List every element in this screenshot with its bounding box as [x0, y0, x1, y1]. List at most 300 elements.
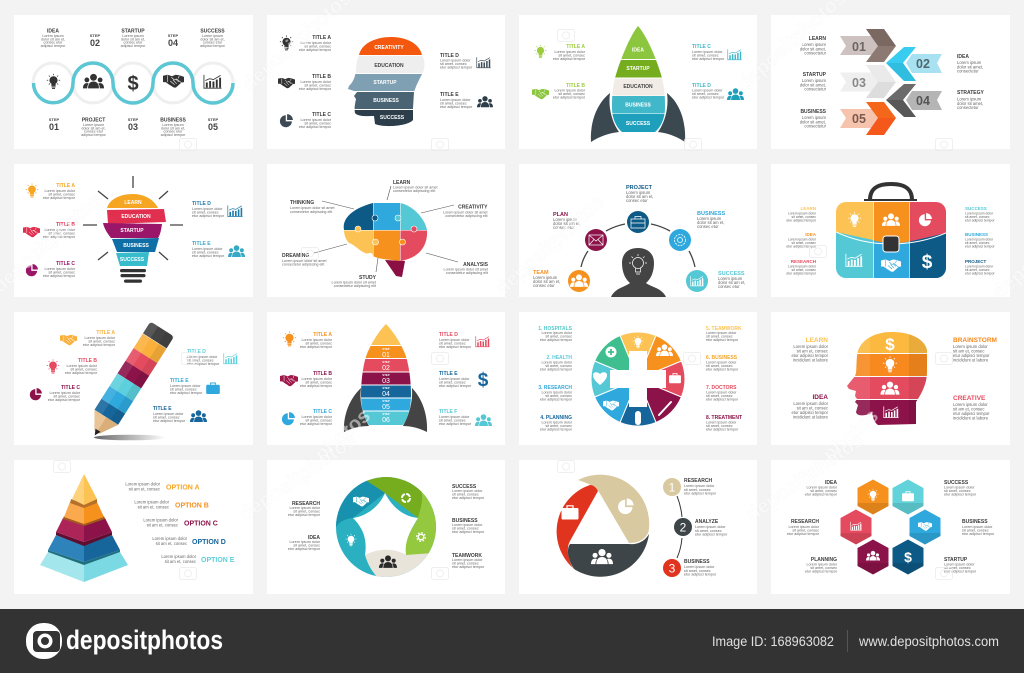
text: title A: sit amet, consec: [88, 340, 115, 344]
text: business: Lorem ipsum dolor: [684, 565, 715, 569]
step: success: adipisci tempor: [200, 44, 226, 48]
text: research: sit amet, consec: [684, 488, 711, 492]
step: business: consec etur: [163, 130, 183, 134]
option D: Lorem ipsum dolor: [152, 536, 188, 541]
website: www.depositphotos.com: [858, 634, 999, 649]
text: doctors: Lorem ipsum dolor: [706, 390, 737, 394]
text: business: sit amet, consec: [965, 241, 990, 245]
text: project: Lorem ipsum: [626, 190, 651, 195]
icon: case: [669, 374, 681, 383]
text: planning: PLANNING: [811, 557, 837, 563]
text: title A: TITLE A: [313, 332, 332, 338]
icon: bulb: [283, 331, 296, 346]
text: title D: TITLE D: [192, 201, 211, 207]
bulb labels: LEARN: [124, 200, 142, 206]
bulb rays: [83, 176, 183, 260]
panel: stepped rocket: [267, 312, 505, 445]
node: team: [568, 270, 590, 292]
text: research: sit amet, consec: [293, 510, 320, 514]
text: business: dolor sit amet,: [800, 119, 826, 124]
bulb labels: BUSINESS: [123, 243, 149, 249]
text: brainstorm: BRAINSTORM: [953, 337, 997, 344]
text: startup: STARTUP: [803, 72, 827, 78]
hexagon: navy: [892, 540, 924, 574]
text: brainstorm: incididunt ut labore: [953, 358, 989, 362]
footer bar: [0, 609, 1024, 673]
rocket fins: [344, 388, 427, 432]
text: research: Lorem ipsum dolor: [684, 484, 715, 488]
pencil: [83, 321, 174, 443]
arrow 03: 03: [852, 76, 866, 90]
badge 2: [674, 518, 692, 536]
text: title D: Lorem ipsum dolor: [439, 338, 470, 342]
text: business: BUSINESS: [452, 518, 478, 524]
arrow 02: 02: [916, 57, 930, 71]
rocket band labels: SUCCESS: [626, 121, 651, 127]
option B: Lorem ipsum dolor: [134, 500, 170, 504]
icon: handshake: [60, 335, 77, 345]
rocket step labels: STEP: [382, 412, 390, 416]
rocket band labels: BUSINESS: [625, 102, 651, 108]
text: title B: Lorem ipsum dolor: [300, 80, 332, 84]
text: learn: LEARN: [800, 206, 816, 211]
text: title D: TITLE D: [692, 83, 711, 89]
text: planning: Lorem ipsum dolor: [806, 562, 838, 566]
text: brainstorm: etur adipisci tempor: [953, 353, 990, 358]
text: idea: Lorem ipsum: [957, 60, 982, 65]
text: title C: sit amet, consec: [305, 418, 332, 422]
text: business: Lorem ipsum: [802, 115, 827, 120]
text: title E: TITLE E: [439, 371, 458, 377]
text: research: etur adipisci tempor: [787, 532, 820, 536]
step: 05: STEP: [208, 117, 219, 122]
text: idea: etur adipisci tempor: [786, 244, 817, 248]
connector arcs: [677, 496, 682, 558]
text: creativity: Lorem ipsum dolor sit amet: [443, 210, 488, 214]
text: title B: etur adipisci tempor: [43, 235, 76, 239]
icon: bulb: [47, 74, 60, 89]
icon: people: [83, 74, 104, 88]
head bands: [847, 332, 927, 425]
text: thinking: consectetur adipiscing elit: [290, 210, 332, 214]
icon: people: [475, 414, 492, 426]
text: business: BUSINESS: [965, 232, 988, 237]
text: title B: Lorem ipsum dolor: [554, 88, 586, 92]
text: title B: Lorem ipsum dolor: [301, 377, 333, 381]
rocket step labels: STEP: [382, 360, 390, 364]
text: dreaming: Lorem ipsum dolor sit amet: [282, 259, 326, 263]
text: project: Lorem ipsum dolor: [965, 264, 994, 268]
icon: handshake: [603, 401, 619, 410]
icon: gear: [417, 533, 425, 541]
text: creative: etur adipisci tempor: [953, 411, 990, 416]
hexagon: blue: [910, 510, 940, 544]
step: 03: 03: [128, 122, 138, 132]
text: brainstorm: sit am et, consec: [953, 348, 984, 354]
text: idea: sit amet, consec: [792, 241, 816, 245]
text: title C: TITLE C: [56, 261, 75, 267]
option E: sit am et, consec: [165, 559, 196, 564]
text: strategy: Lorem ipsum: [957, 96, 982, 102]
text: business: consectetur: [804, 124, 827, 129]
text: creative: incididunt ut labore: [953, 416, 989, 420]
text: business: dolor sit am et,: [697, 220, 724, 225]
text: research: Lorem ipsum dolor: [289, 506, 321, 510]
text: title E: Lorem ipsum dolor: [192, 247, 223, 251]
text: idea: IDEA: [805, 232, 817, 237]
icon: people: [228, 245, 245, 257]
text: learn: Lorem ipsum: [802, 42, 827, 47]
icon: people: [591, 549, 613, 564]
hexagon: maroon: [858, 540, 888, 574]
icon: bulb: [47, 359, 59, 373]
bulb labels: [120, 200, 151, 263]
step: idea: Lorem ipsum: [42, 34, 64, 38]
text: title E: sit amet, consec: [440, 102, 467, 106]
gray rings: [33, 63, 233, 103]
text: business: BUSINESS: [962, 519, 988, 525]
option B: OPTION B: [175, 502, 209, 510]
text: plan: PLAN: [553, 212, 568, 218]
text: idea: Lorem ipsum dolor: [793, 401, 829, 406]
arrow 02: [886, 47, 942, 81]
text: title A: TITLE A: [56, 183, 75, 189]
text: planning: sit amet, consec: [545, 424, 572, 428]
text: business: etur adipisci tempor: [965, 244, 995, 248]
text: title E: sit amet, consec: [170, 388, 197, 392]
icon: dollar: $: [885, 335, 895, 354]
text: success: SUCCESS: [965, 206, 987, 211]
icon: plus: [606, 346, 616, 358]
text: idea: IDEA: [308, 535, 320, 541]
icon: pill: [635, 411, 641, 425]
text: teamwork: sit amet, consec: [706, 334, 733, 338]
icon: pie: [618, 498, 634, 514]
text: title F: etur adipisci tempor: [153, 419, 186, 423]
text: learn: sit amet, consec: [792, 215, 816, 219]
icon: people: [190, 410, 207, 422]
text: learn: LEARN: [393, 180, 411, 186]
icon: dollar: $: [478, 370, 489, 391]
text: research: etur adipisci tempor: [786, 272, 817, 276]
text: analysis: consectetur adipiscing elit: [446, 271, 488, 275]
text: analyze: Lorem ipsum dolor: [695, 525, 726, 529]
text: business: etur adipisci tempor: [706, 368, 739, 372]
step: idea: IDEA: [47, 28, 59, 34]
text: business: sit amet, consec: [962, 528, 989, 532]
icon: heart: [593, 372, 607, 385]
icon: dollar: $: [127, 73, 139, 95]
text: research: etur adipisci tempor: [288, 513, 321, 517]
text: success: Lorem ipsum dolor: [944, 486, 975, 490]
head silhouette bands: [348, 37, 424, 126]
text: title B: sit amet, consec: [48, 232, 75, 236]
text: project: etur adipisci tempor: [965, 272, 995, 276]
text: title C: sit amet, consec: [692, 54, 719, 58]
text: study: STUDY: [359, 275, 377, 281]
badge 3: 3: [669, 562, 676, 576]
bulb labels: SUCCESS: [120, 257, 145, 263]
panel: medical cross circle: [519, 312, 757, 445]
text: title C: sit amet, consec: [53, 394, 80, 398]
step: success: consec etur: [203, 41, 223, 45]
text: doctors: sit amet, consec: [706, 394, 733, 398]
text: thinking: Lorem ipsum dolor sit amet: [290, 206, 334, 210]
text: teamwork: TEAMWORK: [452, 553, 482, 559]
option C: [143, 518, 218, 528]
icon: bulb: [883, 356, 897, 372]
step: startup: Lorem ipsum: [122, 34, 144, 38]
text: thinking: THINKING: [290, 200, 314, 206]
text: title A: etur adipisci tempor: [300, 345, 333, 349]
white star: [353, 493, 418, 555]
text: title B: etur adipisci tempor: [300, 384, 333, 388]
text: title A: Lorem ipsum dolor: [301, 338, 333, 342]
step: 01: STEP: [49, 117, 60, 122]
text: title C: Lorem ipsum dolor: [44, 267, 76, 271]
circle segments: [336, 477, 436, 577]
text: title D: TITLE D: [187, 349, 206, 355]
text: title D: Lorem ipsum dolor: [440, 58, 471, 62]
option A: [125, 482, 200, 492]
node: plan: [585, 229, 607, 251]
text: title C: sit amet, consec: [48, 270, 75, 274]
text: idea: incididunt ut labore: [793, 414, 829, 420]
text: idea: IDEA: [825, 480, 837, 486]
brain puzzle pieces: [344, 203, 428, 261]
text: learn: Lorem ipsum dolor: [788, 212, 817, 216]
pyramid level 3: [56, 516, 112, 542]
text: startup: sit amet, consec: [944, 566, 971, 570]
text: success: Lorem ipsum: [718, 276, 743, 281]
text: title C: etur adipisci tempor: [48, 398, 81, 402]
text: business: etur adipisci tempor: [452, 530, 485, 534]
option E: Lorem ipsum dolor: [161, 554, 197, 559]
text: research: RESEARCH: [791, 259, 816, 264]
text: idea: Lorem ipsum dolor: [788, 238, 817, 242]
text: study: consectetur adipiscing elit: [334, 284, 376, 288]
icon: people: [880, 382, 900, 395]
text: success: etur adipisci tempor: [452, 496, 485, 500]
text: business: 6. BUSINESS: [706, 355, 738, 361]
step: project: dolor sit am et,: [81, 126, 106, 130]
text: success: SUCCESS: [944, 480, 969, 486]
step: startup: dolor sit am et,: [121, 37, 145, 41]
text: idea: IDEA: [957, 54, 969, 60]
text: strategy: dolor sit amet,: [957, 101, 983, 106]
text: idea: sit amet, consec: [293, 544, 320, 548]
rocket step labels: STEP: [382, 399, 390, 403]
panel: head stack: [267, 15, 505, 149]
text: title A: TITLE A: [566, 44, 585, 50]
text: startup: consectetur: [804, 87, 827, 92]
step: 04: STEP: [168, 33, 179, 38]
rocket body bands: [361, 324, 411, 425]
icon: thermometer: [659, 402, 671, 415]
text: title C: TITLE C: [61, 385, 80, 391]
text: title E: TITLE E: [440, 92, 459, 98]
text: creativity: CREATIVITY: [458, 204, 488, 210]
icon: handshake: [278, 78, 295, 88]
text: doctors: etur adipisci tempor: [706, 398, 739, 402]
text: title C: Lorem ipsum dolor: [692, 50, 723, 54]
text: strategy: STRATEGY: [957, 90, 985, 96]
text: title C: TITLE C: [313, 409, 332, 415]
text: title A: sit amet, consec: [305, 342, 332, 346]
text: idea: etur adipisci tempor: [791, 410, 829, 415]
arrow 04: [886, 84, 942, 117]
text: title E: TITLE E: [170, 378, 189, 384]
hexagon: teal: [892, 480, 924, 514]
icon: chart: [846, 254, 863, 266]
hexagon: orange: [858, 480, 888, 514]
rocket step labels: 02: [382, 365, 390, 372]
text: title A: etur adipisci tempor: [43, 196, 76, 200]
text: title B: Lorem ipsum dolor: [66, 364, 98, 368]
text: analyze: etur adipisci tempor: [695, 532, 728, 536]
bulb base: [120, 269, 146, 283]
pyramid level 2: [64, 499, 104, 524]
step: project: Lorem ipsum: [83, 123, 104, 127]
panel: pyramid: [14, 460, 253, 594]
watermarks: depositphotos: [235, 429, 361, 526]
text: idea: etur adipisci tempor: [288, 547, 321, 551]
option C: Lorem ipsum dolor: [143, 518, 179, 522]
text: research: RESEARCH: [791, 519, 819, 525]
rocket band labels: IDEA: [632, 48, 644, 54]
option A: Lorem ipsum dolor: [125, 482, 161, 486]
text: title D: Lorem ipsum dolor: [692, 88, 723, 92]
text: dreaming: DREAMING: [282, 253, 309, 259]
text: research: Lorem ipsum dolor: [788, 264, 817, 268]
leader lines: [314, 186, 458, 272]
text: planning: 4. PLANNING: [540, 415, 572, 421]
text: learn: LEARN: [809, 36, 826, 42]
head band labels: SUCCESS: [380, 115, 405, 121]
panel: puzzle brain: [267, 164, 505, 297]
icon: chart: [884, 406, 899, 418]
logo mark: [26, 623, 62, 659]
arrow 01: 01: [852, 40, 866, 54]
rocket step labels: 03: [382, 378, 390, 385]
rocket step labels: 01: [382, 352, 390, 359]
text: project: PROJECT: [626, 185, 653, 191]
text: title E: Lorem ipsum dolor: [440, 98, 471, 102]
node: success: [686, 270, 708, 292]
head band labels: [373, 45, 405, 121]
text: title E: etur adipisci tempor: [440, 105, 473, 109]
text: business: Lorem ipsum: [697, 216, 722, 221]
icon: case: [206, 383, 220, 394]
text: success: sit amet, consec: [452, 492, 479, 496]
text: title E: sit amet, consec: [439, 380, 466, 384]
step: idea: adipisci tempor: [41, 44, 66, 48]
step: 05: 05: [208, 122, 218, 132]
icon: bulb: [848, 212, 861, 227]
text: analysis: Lorem ipsum dolor sit amet: [444, 268, 488, 272]
panel: star cycle: [267, 460, 505, 594]
head band labels: CREATIVITY: [374, 45, 404, 51]
icon: people: [882, 213, 900, 226]
text: planning: etur adipisci tempor: [805, 570, 838, 574]
text: title E: etur adipisci tempor: [170, 391, 203, 395]
option D: OPTION D: [192, 539, 226, 546]
icon: pie: [282, 412, 295, 425]
rocket step labels: 05: [382, 404, 390, 411]
pyramid level 4: [48, 532, 120, 562]
text: title B: TITLE B: [312, 74, 331, 80]
icon: handshake: [280, 375, 298, 386]
icon: handshake: [163, 75, 184, 88]
text: title F: Lorem ipsum dolor: [153, 412, 184, 416]
text: title F: TITLE E: [153, 406, 172, 412]
text: research: Lorem ipsum dolor: [541, 390, 573, 394]
text: business: Lorem ipsum dolor: [452, 523, 483, 527]
text: startup: etur adipisci tempor: [944, 570, 977, 574]
text: success: sit amet, consec: [965, 215, 990, 219]
text: learn: Lorem ipsum dolor sit amet: [393, 186, 437, 190]
text: dreaming: consectetur adipiscing elit: [282, 262, 324, 266]
option D: [152, 536, 226, 546]
text: title A: etur adipisci tempor: [83, 343, 116, 347]
text: title A: etur adipisci tempor: [553, 57, 586, 61]
text: title C: Lorem ipsum dolor: [301, 415, 333, 419]
text: title A: sit amet, consec: [304, 44, 331, 48]
text: startup: Lorem ipsum: [802, 78, 827, 83]
pyramid level 5: [40, 550, 128, 582]
panel: numbered arrows: [771, 15, 1010, 149]
text: treatment: 8. TREATMENT: [706, 415, 742, 421]
text: learn: consectetur: [804, 51, 827, 56]
text: creative: CREATIVE: [953, 395, 986, 402]
head band labels: EDUCATION: [374, 63, 404, 69]
icon: bulb: [346, 534, 356, 546]
head band labels: BUSINESS: [373, 98, 399, 104]
text: research: sit amet, consec: [792, 528, 819, 532]
text: business: BUSINESS: [697, 211, 725, 217]
step: project: PROJECT: [82, 118, 105, 124]
text: startup: Lorem ipsum dolor: [944, 562, 975, 566]
badge 3: [663, 559, 681, 577]
text: title B: Lorem ipsum dolor: [44, 228, 76, 232]
text: teamwork: 5. TEAMWORK: [706, 326, 742, 332]
text: hospitals: Lorem ipsum dolor: [541, 331, 573, 335]
watermarks: depositphotos: [492, 191, 609, 300]
icon: chart: [477, 57, 491, 68]
text: teamwork: Lorem ipsum dolor: [706, 331, 737, 335]
text: title D: etur adipisci tempor: [192, 214, 225, 218]
step: idea: consec etur: [43, 41, 63, 45]
option E: OPTION E: [201, 557, 235, 564]
text: learn: consectetur adipiscing elit: [393, 189, 435, 193]
text: title F: sit amet, consec: [153, 416, 180, 420]
text: treatment: Lorem ipsum dolor: [706, 420, 737, 424]
brain stem: [385, 260, 405, 277]
step: idea: dolor sit am et,: [41, 37, 65, 41]
text: title D: TITLE D: [439, 332, 458, 338]
option E: [161, 554, 235, 564]
rocket band labels: [623, 48, 653, 127]
text: startup: STARTUP: [944, 557, 968, 563]
text: title A: Lorem ipsum dolor: [300, 41, 332, 45]
text: title B: etur adipisci tempor: [553, 96, 586, 100]
step: business: dolor sit am et,: [161, 126, 185, 130]
text: learn: etur adipisci tempor: [791, 353, 829, 358]
panel: hexagons: [771, 460, 1010, 594]
text: learn: sit am et, consec: [797, 348, 828, 354]
text: hospitals: etur adipisci tempor: [540, 338, 573, 342]
text: brainstorm: Lorem ipsum dolor: [953, 344, 988, 349]
